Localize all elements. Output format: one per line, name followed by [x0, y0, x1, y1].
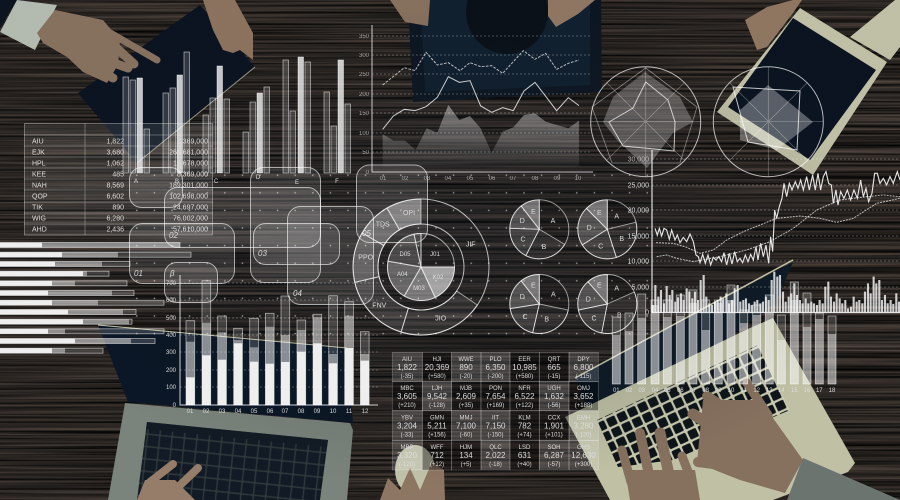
line and area chart: top centre: 05 — [467, 176, 474, 182]
data table: left: 76,002,000 — [173, 216, 208, 222]
data table: left: 8,369,000 — [177, 172, 208, 178]
data grid: bottom centre: (+580) — [516, 374, 533, 380]
data grid: bottom centre: 6,522 — [514, 392, 535, 401]
data table: left: 3,680 — [106, 150, 124, 156]
stacked bar chart: bottom left: 100 — [166, 385, 177, 391]
data grid: bottom centre: MBP — [400, 445, 414, 451]
data grid: bottom centre: NFR — [518, 386, 531, 392]
pie chart: bottom-right small: D — [586, 296, 591, 304]
data grid: bottom centre: 7,150 — [485, 422, 506, 430]
data grid: bottom centre: 7,100 — [456, 422, 477, 430]
data grid: bottom centre: 2,022 — [485, 451, 506, 460]
data grid: bottom centre: (-35) — [401, 374, 413, 380]
data table: left: NAH — [32, 182, 47, 190]
data grid: bottom centre: (+5) — [461, 462, 471, 468]
data grid: bottom centre: GHS — [577, 445, 590, 451]
stacked bar chart: bottom left: 04 — [235, 409, 242, 415]
data grid: bottom centre: 665 — [547, 363, 561, 372]
data grid: bottom centre: QRT — [548, 357, 561, 363]
radar chart: left — [591, 67, 701, 177]
data grid: bottom centre: SOH — [547, 445, 561, 451]
data grid: bottom centre: 3,204 — [397, 422, 418, 430]
line and area chart: top centre — [359, 25, 593, 182]
data grid: bottom centre: 7,654 — [485, 392, 506, 401]
data grid: bottom centre: 6,287 — [544, 451, 565, 460]
photo: mouse and hand at bottom centre — [380, 445, 445, 500]
photo: bottom-left laptop and hand — [98, 325, 353, 500]
donut and pie chart: centre: K02 — [433, 275, 444, 281]
bar chart: bottom-right over laptop: 08 — [702, 388, 710, 394]
photo: top-right cream tablet and hand — [717, 0, 900, 175]
data grid: bottom centre: 6,350 — [485, 363, 506, 372]
pie chart: bottom-left small: D — [520, 294, 525, 301]
data table: left: 8,569 — [106, 182, 124, 190]
data grid: bottom centre: (+12) — [430, 462, 444, 468]
pie chart: top-right small: D — [587, 225, 592, 232]
pie chart: bottom-left small: B — [544, 316, 549, 324]
rounded category panels — [130, 165, 428, 304]
bar chart: grouped vertical bars A to F — [123, 52, 350, 186]
bar chart: bottom-right over laptop: 05 — [664, 388, 671, 394]
pie chart: top-left small: A — [551, 218, 556, 225]
donut and pie chart: centre: OPI — [403, 210, 415, 217]
rounded category panels: 02 — [169, 231, 178, 240]
bar chart: bottom-right over laptop: 07 — [690, 388, 697, 394]
data grid: bottom centre: (+40) — [517, 462, 532, 468]
data grid: bottom centre: CCX — [548, 416, 560, 422]
data grid: bottom centre: 1,632 — [544, 392, 565, 401]
stacked bar chart: bottom left: 07 — [282, 409, 289, 415]
stacked bar chart: bottom left: 200 — [166, 368, 177, 374]
data grid: bottom centre: LJH — [432, 386, 442, 392]
data grid: bottom centre: (-120) — [575, 432, 592, 438]
stacked bar chart: bottom left: 11 — [346, 409, 353, 415]
data table: left — [24, 123, 213, 235]
data grid: bottom centre: 1,822 — [397, 363, 418, 372]
pie chart: bottom-right small: B — [617, 312, 622, 320]
data grid: bottom centre: 134 — [459, 451, 473, 460]
line and area chart: top centre: 02 — [402, 176, 409, 182]
donut and pie chart: centre: JIO — [435, 316, 447, 322]
data grid: bottom centre: 3,320 — [397, 451, 418, 460]
data table: left: 268,681,000 — [169, 150, 208, 156]
data grid: bottom centre: WFF — [430, 445, 444, 451]
line chart with volume bars: right: 10,000 — [628, 258, 649, 266]
data grid: bottom centre: 631 — [518, 451, 532, 460]
data grid: bottom centre: HJI — [432, 357, 442, 363]
line and area chart: top centre: 01 — [380, 176, 387, 182]
stacked bar chart: bottom left: 01 — [187, 409, 194, 415]
data table: left: 189,301,000 — [169, 182, 208, 190]
photo: top-centre tablet — [390, 0, 602, 102]
line and area chart: top centre: 04 — [445, 176, 452, 182]
bar chart: grouped vertical bars A to F: E — [295, 180, 299, 186]
bar chart: horizontal progress bars — [0, 242, 191, 353]
data table: left: 24,697,000 — [173, 204, 208, 212]
pie chart: bottom-left small: E — [531, 282, 536, 290]
rounded category panels: 05 — [362, 229, 371, 238]
stacked bar chart: bottom left: 500 — [166, 316, 177, 322]
data grid: bottom centre: PLO — [489, 357, 502, 363]
donut and pie chart: centre — [353, 199, 489, 335]
bar chart: bottom-right over laptop: 02 — [626, 388, 633, 394]
data table: left: 16,678,000 — [173, 160, 208, 168]
bar chart: grouped vertical bars A to F: A — [134, 179, 138, 185]
pie chart: top-left small: D — [520, 218, 525, 225]
data grid: bottom centre: (+156) — [428, 432, 446, 438]
donut and pie chart: centre: A04 — [397, 272, 408, 278]
data grid: bottom centre: UGH — [547, 386, 561, 392]
pie chart: top-right small: B — [619, 236, 624, 243]
data grid: bottom centre: (+188) — [575, 403, 592, 409]
line and area chart: top centre: 200 — [359, 92, 370, 98]
pie chart: top-right small: E — [597, 210, 602, 217]
data grid: bottom centre: (-60) — [460, 432, 472, 438]
data grid: bottom centre: (-15) — [548, 374, 560, 380]
bar chart: bottom-right over laptop: 16 — [804, 388, 811, 394]
data grid: bottom centre: EMH — [577, 416, 590, 422]
data table: left: 1,062 — [106, 160, 124, 168]
line and area chart: top centre: 250 — [359, 72, 370, 78]
line and area chart: top centre: 100 — [359, 131, 370, 137]
data table: left: QOP — [32, 194, 48, 200]
data grid: bottom centre: (+35) — [459, 403, 473, 409]
bar chart: bottom-right over laptop: 11 — [741, 388, 747, 394]
radar chart: right — [713, 67, 823, 177]
data grid: bottom centre: MMJ — [460, 416, 472, 422]
pie chart: top-left small: B — [542, 244, 547, 251]
pie chart: bottom-left small — [510, 274, 569, 334]
data grid: bottom centre: (-56) — [548, 403, 560, 409]
data table: left: 2,436 — [106, 226, 124, 234]
line chart with volume bars: right: 20,000 — [628, 208, 649, 214]
donut and pie chart: centre: M03 — [413, 286, 425, 292]
data grid: bottom centre: (+122) — [516, 403, 533, 409]
line chart with volume bars: right — [628, 150, 900, 316]
data grid: bottom centre: DPY — [577, 357, 590, 363]
pie chart: bottom-left small: C — [522, 314, 528, 321]
data table: left: AIU — [32, 138, 44, 146]
line and area chart: top centre: 10 — [575, 176, 582, 182]
data grid: bottom centre: WWE — [458, 357, 474, 363]
data table: left: EJK — [32, 150, 45, 156]
bar chart: bottom-right over laptop: 04 — [652, 388, 659, 394]
stacked bar chart: bottom left — [166, 275, 380, 415]
data grid: bottom centre: (+210) — [398, 403, 416, 409]
pie chart: bottom-right small: E — [597, 282, 602, 290]
bar chart: bottom-right over laptop: 18 — [829, 388, 836, 394]
data grid: bottom centre: 2,609 — [456, 392, 477, 401]
line chart with volume bars: right: 5,000 — [631, 284, 649, 292]
bar chart: bottom-right over laptop — [612, 282, 836, 394]
stacked bar chart: bottom left: 02 — [203, 409, 210, 415]
bar chart: bottom-right over laptop: 09 — [715, 388, 722, 394]
stacked bar chart: bottom left: 400 — [166, 333, 177, 339]
stacked bar chart: bottom left: 0 — [173, 403, 177, 409]
stacked bar chart: bottom left: 600 — [166, 298, 177, 304]
line and area chart: top centre: 300 — [359, 53, 370, 59]
data grid: bottom centre: 5,211 — [427, 422, 447, 430]
donut and pie chart: centre: FNV — [372, 302, 387, 310]
data grid: bottom centre: 712 — [430, 451, 444, 460]
data grid: bottom centre: MJB — [460, 386, 472, 392]
stacked bar chart: bottom left: 03 — [219, 409, 226, 415]
photo: top-left person with dark tablet — [0, 0, 255, 163]
data table: left: 890 — [112, 204, 124, 212]
rounded category panels: 04 — [293, 289, 302, 298]
stacked bar chart: bottom left: 09 — [314, 409, 321, 415]
line chart with volume bars: right: 0 — [645, 310, 649, 316]
pie chart: bottom-left small: A — [551, 292, 556, 298]
data table: left: 6,280 — [106, 216, 124, 222]
line chart with volume bars: right: 25,000 — [628, 182, 649, 190]
data table: left: KEE — [32, 172, 46, 178]
data grid: bottom centre: 3,652 — [573, 392, 594, 401]
line and area chart: top centre: 0 — [366, 170, 370, 176]
stacked bar chart: bottom left: 08 — [298, 409, 305, 415]
bar chart: bottom-right over laptop: 15 — [791, 388, 798, 394]
bar chart: bottom-right over laptop: 06 — [677, 388, 684, 394]
data grid: bottom centre: (+169) — [487, 403, 504, 409]
data grid: bottom centre: 20,369 — [425, 363, 450, 372]
rounded category panels: 03 — [258, 249, 267, 258]
bar chart: bottom-right over laptop: 03 — [638, 388, 646, 394]
line and area chart: top centre: 50 — [362, 150, 370, 156]
donut and pie chart: centre: J01 — [430, 252, 440, 258]
line and area chart: top centre: 07 — [510, 176, 517, 182]
line and area chart: top centre: 350 — [359, 34, 370, 40]
data grid: bottom centre: EER — [518, 357, 531, 363]
bar chart: bottom-right over laptop: 01 — [613, 388, 620, 394]
bar chart: bottom-right over laptop: 12 — [753, 388, 761, 394]
stacked bar chart: bottom left: 300 — [166, 350, 177, 356]
data table: left: 6,602 — [106, 194, 124, 200]
data grid: bottom centre: (+580) — [428, 374, 446, 380]
data table: left: 2,369,000 — [177, 138, 208, 146]
pie chart: bottom-right small — [578, 274, 637, 334]
overlay: dot grid — [128, 172, 658, 340]
data grid: bottom centre: MBC — [400, 386, 414, 392]
data grid: bottom centre: (-200) — [487, 374, 504, 380]
data table: left: 102,698,000 — [169, 194, 208, 200]
data grid: bottom centre: (-128) — [429, 403, 445, 409]
line and area chart: top centre: 06 — [489, 176, 496, 182]
line and area chart: top centre: 150 — [359, 111, 370, 117]
data grid: bottom centre: (+74) — [517, 432, 532, 438]
data grid: bottom centre: (-20) — [460, 374, 472, 380]
pie chart: bottom-right small: C — [591, 316, 597, 322]
bar chart: bottom-right over laptop: 13 — [766, 388, 773, 394]
bar chart: bottom-right over laptop: 14 — [778, 388, 785, 394]
data grid: bottom centre: (+101) — [545, 432, 563, 438]
data grid: bottom centre: 1,901 — [544, 422, 565, 430]
stacked bar chart: bottom left: 12 — [362, 409, 369, 415]
pie chart: top-right small: C — [598, 244, 603, 250]
data grid: bottom centre: (-18) — [489, 462, 502, 468]
data grid: bottom centre: 10,985 — [512, 363, 537, 372]
data table: left: 57,610,000 — [173, 226, 208, 234]
data grid: bottom centre: (+300) — [575, 462, 592, 468]
data grid: bottom centre: YBV — [401, 416, 413, 422]
line chart with volume bars: right: 30,000 — [628, 156, 649, 164]
bar chart: grouped vertical bars A to F: F — [335, 179, 339, 185]
photo: bottom-right cream laptop, keyboard and hands — [565, 260, 900, 500]
data grid: bottom centre: QLC — [489, 445, 502, 451]
data table: left: 485 — [112, 172, 124, 178]
donut and pie chart: centre: TDS — [376, 222, 390, 228]
pie chart: top-left small: C — [520, 236, 526, 244]
data grid: bottom centre: GMN — [430, 416, 444, 422]
data grid: bottom centre: IIT — [492, 416, 499, 422]
data grid: bottom centre: (-120) — [399, 462, 415, 468]
pie chart: top-right small: A — [614, 214, 619, 220]
data table: left: TIK — [32, 204, 43, 212]
data grid: bottom centre: HJM — [460, 445, 472, 451]
bar chart: grouped vertical bars A to F: D — [256, 175, 261, 181]
stacked bar chart: bottom left: 10 — [330, 409, 337, 415]
data grid: bottom centre: (-57) — [548, 462, 560, 468]
data grid: bottom centre: 9,542 — [427, 392, 448, 401]
stacked bar chart: bottom left: 05 — [251, 409, 258, 415]
data grid: bottom centre: 12,630 — [571, 451, 596, 460]
donut and pie chart: centre: D05 — [399, 252, 411, 258]
data grid: bottom centre — [392, 352, 598, 470]
donut and pie chart: centre: JIF — [466, 242, 476, 248]
rounded category panels: 01 — [134, 269, 143, 278]
bar chart: bottom-right over laptop: 10 — [728, 388, 735, 394]
stacked bar chart: bottom left: 700 — [166, 281, 177, 287]
pie chart: top-left small — [510, 200, 569, 259]
data table: left: AHD — [32, 226, 47, 234]
line and area chart: top centre: 08 — [532, 176, 539, 182]
data grid: bottom centre: (-115) — [576, 374, 591, 380]
data grid: bottom centre: (-33) — [401, 432, 413, 438]
data table: left: HPL — [32, 160, 46, 168]
bar chart: grouped vertical bars A to F: C — [214, 179, 219, 185]
data grid: bottom centre: OMJ — [577, 386, 590, 392]
line chart with volume bars: right: 15,000 — [628, 234, 649, 240]
data table: left: 1,822 — [106, 138, 124, 146]
data grid: bottom centre: 6,800 — [573, 363, 594, 372]
data table: left: WIG — [32, 216, 46, 222]
bar chart: grouped vertical bars A to F: B — [175, 179, 179, 185]
pie chart: bottom-right small: A — [614, 286, 619, 292]
data grid: bottom centre: PON — [489, 386, 502, 392]
line and area chart: top centre: 03 — [424, 176, 431, 182]
bar chart: bottom-right over laptop: 17 — [816, 388, 823, 394]
data grid: bottom centre: (-150) — [487, 432, 504, 438]
pie chart: top-right small — [578, 200, 637, 259]
pie chart: top-left small: E — [531, 209, 536, 216]
data grid: bottom centre: 782 — [518, 422, 532, 430]
stacked bar chart: bottom left: 06 — [267, 409, 274, 415]
donut and pie chart: centre: PPO — [358, 254, 374, 262]
data grid: bottom centre: LSD — [519, 445, 531, 451]
line and area chart: top centre: 09 — [554, 176, 561, 182]
rounded category panels: β — [169, 269, 175, 278]
data grid: bottom centre: KLM — [518, 416, 531, 422]
data grid: bottom centre: 890 — [459, 363, 473, 372]
data grid: bottom centre: 3,280 — [573, 422, 594, 430]
data grid: bottom centre: AIU — [402, 357, 412, 363]
data grid: bottom centre: 3,605 — [397, 392, 418, 401]
